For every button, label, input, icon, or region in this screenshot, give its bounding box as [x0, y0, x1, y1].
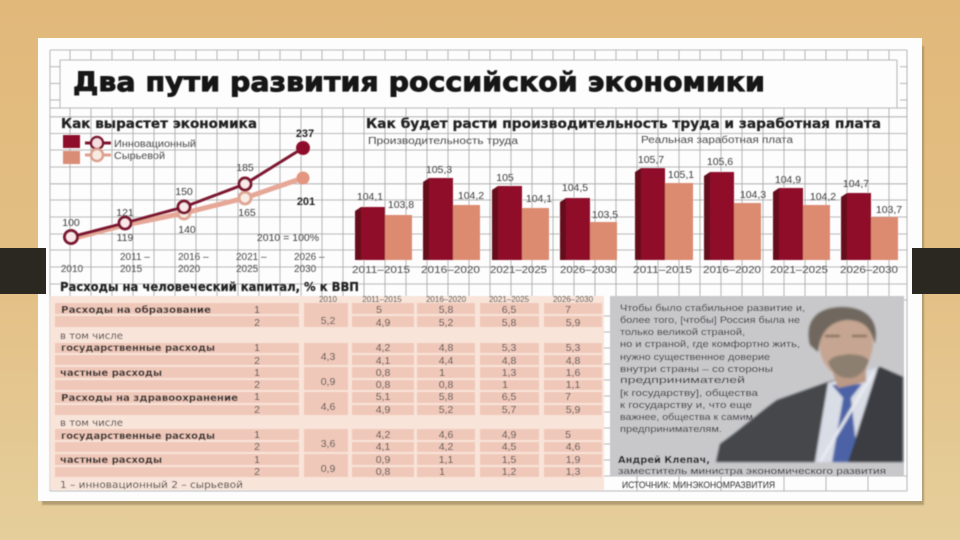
column 2010 values: 4,6: [321, 401, 335, 413]
column 2011-2015 values: 0,8: [376, 379, 390, 391]
column 2026-2030 values: 7: [565, 391, 571, 403]
table row labels: в том числе: [60, 331, 123, 342]
column 2011-2015 values: 4,2: [376, 429, 390, 441]
column 2021-2025 values: 5,7: [502, 404, 516, 416]
quote text: но и страной, где комфортно жить,: [620, 339, 800, 350]
subheading: productivity: Производительность труда: [368, 136, 519, 147]
column 2026-2030 values: 7: [565, 304, 571, 316]
column 2010 values: 3,6: [321, 438, 335, 450]
table row labels: государственные расходы: [61, 343, 215, 354]
column 2016-2020 values: 4,2: [439, 441, 453, 453]
values: wages: [638, 154, 902, 216]
quote text: предпринимателей: [620, 375, 745, 386]
scenario numbers: 1: [254, 391, 260, 403]
column 2016-2020 values: 1: [439, 466, 445, 478]
speaker role: заместитель министра экономического развития: [618, 466, 886, 477]
values: productivity: [357, 164, 618, 221]
table background: [50, 296, 604, 490]
legend: Инновационный: [114, 139, 196, 150]
column 2011-2015 values: 5,1: [376, 391, 390, 403]
scenario numbers: 1: [254, 304, 260, 316]
column 2021-2025 values: [502, 304, 516, 478]
values: productivity: 104,1: [357, 191, 383, 203]
column 2021-2025 values: 6,5: [502, 391, 516, 403]
values: productivity: 104,2: [458, 190, 484, 202]
table column headers: 2010: [319, 295, 337, 304]
line chart values: 165: [238, 207, 256, 219]
portrait: [716, 307, 903, 462]
column 2016-2020 values: 5,2: [439, 404, 453, 416]
line chart axis labels: 2020: [178, 264, 201, 275]
axis: wages: 2011–2015: [633, 265, 693, 276]
quote text: внутри страны – со стороны: [620, 364, 773, 375]
column 2011-2015 values: [376, 304, 390, 478]
dark side band right: [912, 248, 960, 294]
column 2021-2025 values: 1,2: [502, 466, 516, 478]
table row labels: частные расходы: [60, 455, 162, 466]
values: productivity: 105,3: [426, 164, 452, 176]
quote text: важнее, общества к самим: [620, 412, 753, 423]
line chart axis labels: 2011 –: [120, 252, 150, 263]
title: Два пути развития российской экономики: [73, 67, 765, 98]
line chart values: 121: [116, 207, 134, 219]
legend: [63, 135, 196, 164]
line chart axis labels: 2016 –: [178, 252, 209, 263]
line chart axis labels: [61, 252, 325, 275]
scenario numbers: 1: [254, 454, 260, 466]
axis: productivity: 2026–2030: [560, 265, 617, 276]
table row labels: в том числе: [60, 418, 123, 429]
column 2010 values: [321, 315, 335, 475]
table cells: [55, 303, 602, 477]
quote text: более того, [чтобы] Россия была не: [620, 315, 800, 326]
axis: wages: 2016–2020: [703, 265, 761, 276]
speaker name: Андрей Клепач,: [618, 455, 710, 466]
column 2016-2020 values: 4,4: [439, 355, 453, 367]
column 2016-2020 values: 5,2: [439, 317, 453, 329]
column 2021-2025 values: 4,5: [502, 441, 516, 453]
column 2010 values: 5,2: [321, 315, 335, 327]
line chart axis labels: 2021 –: [236, 252, 267, 263]
values: productivity: 104,1: [526, 193, 552, 205]
table row labels: Расходы на образование: [61, 304, 211, 316]
line chart values: 237: [296, 128, 314, 140]
line chart values: 119: [117, 232, 134, 244]
line chart values: 100: [62, 217, 80, 229]
line chart axis labels: 2026 –: [294, 252, 325, 263]
column 2016-2020 values: 4,6: [439, 429, 453, 441]
column 2021-2025 values: 4,9: [502, 429, 516, 441]
column 2016-2020 values: 1,1: [439, 454, 453, 466]
values: wages: 105,7: [638, 154, 664, 166]
heading: economy growth: Как вырастет экономика: [61, 117, 257, 132]
table column headers: 2011–2015: [362, 295, 402, 304]
line chart values: 185: [236, 162, 254, 174]
quote text: нужно существенное доверие: [620, 352, 770, 363]
heading: human capital: Расходы на человеческий капитал, % к ВВП: [60, 279, 359, 294]
scenario numbers: 1: [254, 429, 260, 441]
line chart axis labels: 2030: [294, 264, 317, 275]
scenario numbers: 2: [254, 404, 260, 416]
column 2026-2030 values: 5,9: [566, 317, 580, 329]
quote text: [620, 303, 805, 435]
column 2021-2025 values: 1,3: [502, 367, 516, 379]
column 2010 values: 4,3: [321, 351, 335, 363]
scenario numbers: 2: [254, 379, 260, 391]
column 2021-2025 values: 1,5: [502, 454, 516, 466]
line chart values: 150: [175, 186, 193, 198]
subheading: wages: Реальная заработная плата: [641, 134, 794, 146]
column 2016-2020 values: [439, 304, 453, 478]
panel: quote: [610, 296, 904, 491]
white sheet: [38, 38, 922, 501]
line: raw scenario: [71, 172, 310, 239]
table row labels: частные расходы: [60, 368, 162, 379]
dark side band left: [0, 248, 46, 294]
source: ИСТОЧНИК: МИНЭКОНОМРАЗВИТИЯ: [622, 480, 775, 491]
line chart axis labels: 2025: [236, 264, 259, 275]
column 2021-2025 values: 1: [502, 379, 508, 391]
column 2011-2015 values: 0,9: [376, 454, 390, 466]
column 2011-2015 values: 4,9: [376, 404, 390, 416]
legend: Сырьевой: [114, 151, 165, 162]
column 2021-2025 values: 6,5: [502, 304, 516, 316]
column 2011-2015 values: 0,8: [376, 367, 390, 379]
line chart values: [62, 128, 319, 244]
table column headers: 2016–2020: [426, 295, 467, 304]
column 2026-2030 values: 5: [565, 429, 571, 441]
column 2026-2030 values: 5,3: [566, 342, 580, 354]
column 2021-2025 values: 4,8: [502, 355, 516, 367]
table footnote: 1 – инновационный 2 – сырьевой: [60, 480, 243, 491]
axis: productivity: 2021–2025: [490, 265, 547, 276]
sheet shadow: [42, 46, 924, 505]
line chart values: 201: [297, 196, 315, 208]
scenario numbers: [254, 304, 260, 478]
column 2026-2030 values: 1,3: [566, 466, 580, 478]
values: wages: 104,9: [775, 174, 801, 186]
scenario numbers: 2: [254, 317, 260, 329]
quote text: только великой страной,: [620, 327, 745, 338]
axis: wages: 2021–2025: [770, 265, 828, 276]
column 2026-2030 values: [565, 304, 580, 478]
panel: human capital spending table: [50, 279, 604, 491]
column 2016-2020 values: 5,8: [439, 391, 453, 403]
column 2026-2030 values: 1,1: [566, 379, 580, 391]
axis: wages: 2026–2030: [840, 265, 898, 276]
quote text: Чтобы было стабильное развитие и,: [620, 303, 805, 314]
axis: wages: [633, 265, 898, 276]
column 2010 values: 0,9: [321, 376, 335, 388]
table column headers: [319, 295, 594, 304]
values: wages: 105,6: [707, 156, 733, 168]
bar chart: labour productivity: [352, 136, 618, 276]
column 2010 values: 0,9: [321, 463, 335, 475]
line chart axis labels: 2015: [120, 264, 143, 275]
values: wages: 105,1: [668, 169, 694, 181]
column 2016-2020 values: 0,8: [439, 379, 453, 391]
scenario numbers: 2: [254, 355, 260, 367]
scenario numbers: 2: [254, 466, 260, 478]
table row labels: Расходы на здравоохранение: [61, 393, 238, 404]
column 2021-2025 values: 5,3: [502, 342, 516, 354]
scenario numbers: 1: [254, 367, 260, 379]
values: wages: 104,7: [843, 178, 869, 190]
values: productivity: 105: [496, 172, 514, 184]
line: innovation scenario: [64, 141, 310, 244]
table column headers: 2021–2025: [489, 295, 530, 304]
axis: productivity: 2016–2020: [421, 265, 481, 276]
scenario numbers: 2: [254, 441, 260, 453]
values: wages: 104,3: [740, 189, 766, 201]
values: productivity: 103,5: [592, 209, 618, 221]
quote text: [к государству], общества: [620, 388, 759, 399]
values: wages: 104,2: [810, 191, 836, 203]
heading: productivity and wages: Как будет расти производительность труда и заработная плата: [366, 117, 881, 132]
column 2026-2030 values: 4,6: [566, 441, 580, 453]
column 2021-2025 values: 5,8: [502, 317, 516, 329]
axis: productivity: 2011–2015: [352, 265, 411, 276]
bar chart: real wages: [633, 134, 902, 276]
column 2026-2030 values: 4,8: [566, 355, 580, 367]
values: productivity: 104,5: [562, 182, 588, 194]
values: productivity: 103,8: [388, 199, 414, 211]
bars: productivity: [355, 178, 617, 260]
values: wages: 103,7: [876, 204, 902, 216]
panel: line chart economy growth: [61, 117, 325, 275]
column 2011-2015 values: 5: [376, 304, 382, 316]
column 2026-2030 values: 1,6: [566, 367, 580, 379]
column 2016-2020 values: 5,8: [439, 304, 453, 316]
column 2011-2015 values: 4,1: [376, 441, 390, 453]
quote background: [610, 296, 904, 476]
column 2026-2030 values: 5,9: [566, 404, 580, 416]
column 2026-2030 values: 1,9: [566, 454, 580, 466]
column 2016-2020 values: 4,8: [439, 342, 453, 354]
line chart values: 140: [178, 224, 196, 236]
quote text: к государству и, что еще: [620, 400, 752, 411]
column 2011-2015 values: 4,1: [376, 355, 390, 367]
column 2016-2020 values: 1: [439, 367, 445, 379]
quote text: предпринимателям.: [620, 424, 722, 435]
table column headers: 2026–2030: [553, 295, 594, 304]
bars: wages: [635, 168, 898, 260]
axis: productivity: [352, 265, 617, 276]
column 2011-2015 values: 0,8: [376, 466, 390, 478]
column 2011-2015 values: 4,9: [376, 317, 390, 329]
column 2011-2015 values: 4,2: [376, 342, 390, 354]
table row labels: государственные расходы: [61, 431, 215, 442]
scenario numbers: 1: [254, 342, 260, 354]
line chart values: 2010 = 100%: [257, 232, 319, 244]
line chart axis labels: 2010: [61, 264, 84, 275]
table row labels: [60, 304, 238, 466]
